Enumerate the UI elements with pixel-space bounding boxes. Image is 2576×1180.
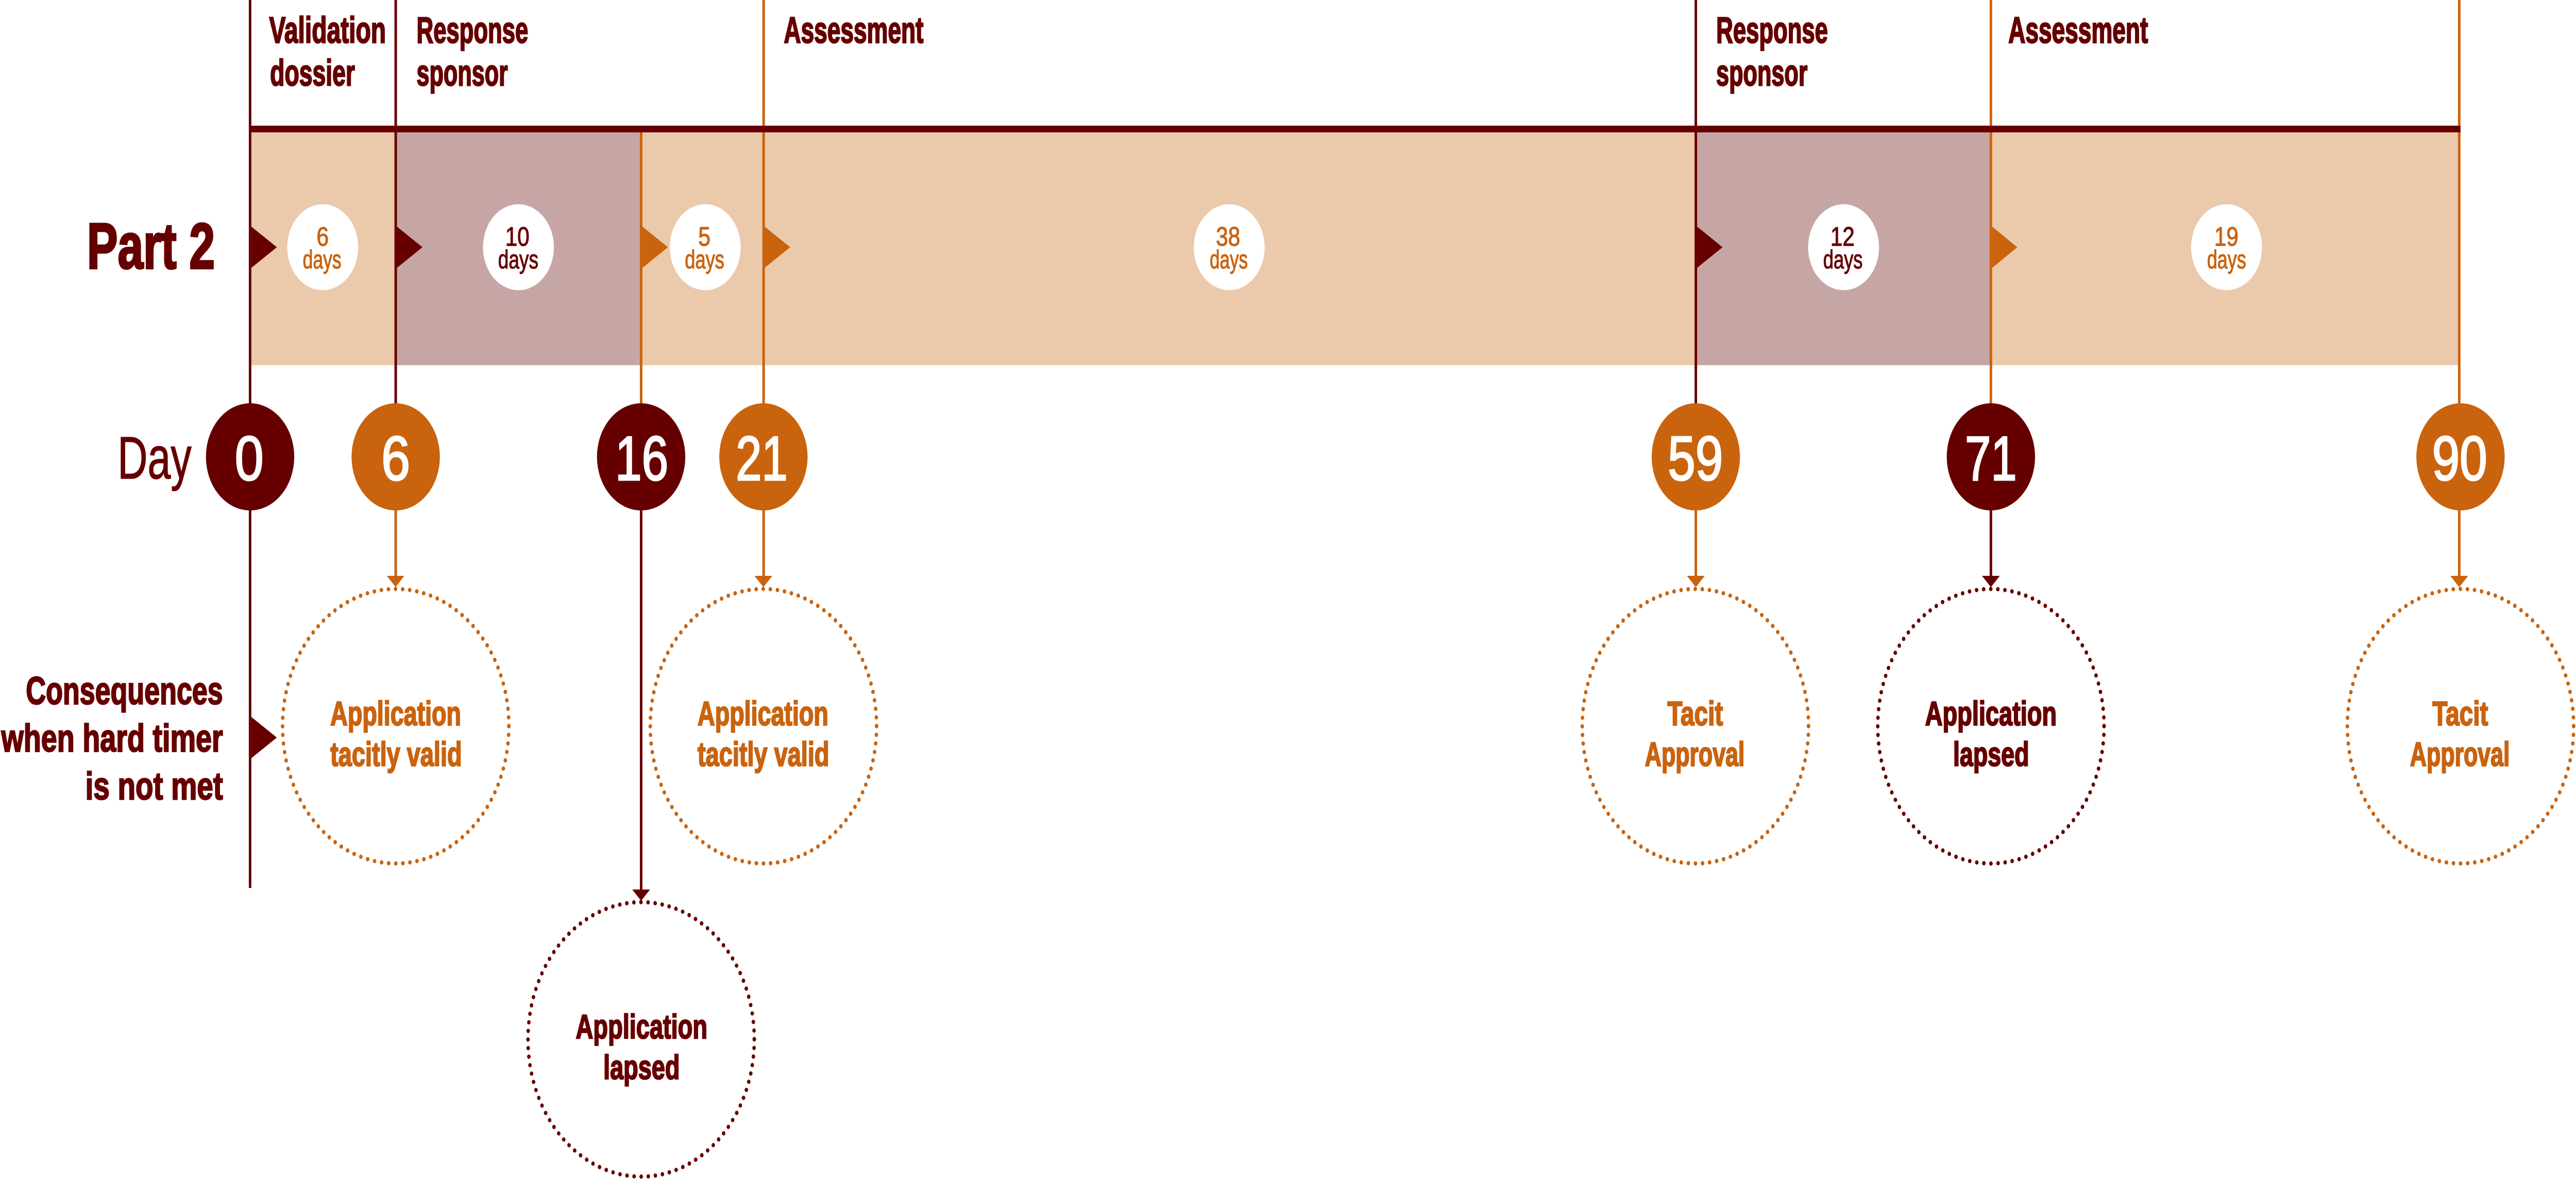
marker: day 59 triangle [1697, 227, 1722, 268]
outcome: Application tacitly valid (day 21) [650, 589, 876, 863]
outcome: Tacit Approval (day 90): Tacit [2432, 694, 2488, 732]
arrow: day 71 [1982, 576, 2000, 587]
duration: 5 days: 5 [698, 222, 710, 252]
marker: consequences triangle [251, 717, 277, 758]
day badge: 16 [597, 403, 685, 510]
duration: 10 days: days [498, 245, 538, 274]
marker: day 21 triangle [765, 227, 790, 268]
marker: day 16 triangle [642, 227, 668, 268]
outcome: Tacit Approval (day 90) [2347, 589, 2573, 863]
heading: Response sponsor second: sponsor [1716, 53, 1807, 93]
vertical line: day 90 [2458, 0, 2461, 577]
duration: 12 days: days [1823, 245, 1862, 274]
duration: 19 days [2191, 204, 2262, 290]
outcome: Tacit Approval (day 59) [1582, 589, 1808, 863]
heading: Response sponsor [416, 10, 528, 93]
vertical line: day 0 [249, 0, 251, 888]
top rule [250, 126, 2461, 132]
label: Consequences when hard timer is not met: when hard timer [1, 716, 223, 760]
day badge: 16: 16 [615, 423, 668, 493]
duration: 5 days [670, 204, 741, 290]
day badge: 71: 71 [1965, 423, 2017, 493]
vertical line: day 16 [640, 132, 642, 891]
duration: 12 days: 12 [1831, 222, 1855, 252]
duration: 38 days [1194, 204, 1265, 290]
day badge: 90 [2416, 403, 2505, 510]
marker: day 71 triangle [1992, 227, 2017, 268]
heading: Validation dossier: dossier [270, 53, 355, 93]
outcome: Application tacitly valid (day 21): Application [698, 694, 828, 732]
outcome: Application tacitly valid (day 6) [282, 589, 509, 863]
day badge: 59 [1652, 403, 1740, 510]
outcome: Application tacitly valid (day 6): tacitly valid [330, 735, 462, 773]
day badge: 6: 6 [381, 423, 410, 493]
outcome: Application lapsed (day 16): Application [576, 1007, 707, 1046]
duration: 38 days: 38 [1216, 222, 1240, 252]
duration: 19 days: days [2207, 245, 2246, 274]
duration: 6 days: days [303, 245, 342, 274]
duration: 6 days: 6 [316, 222, 329, 252]
outcome: Application lapsed (day 71) [1878, 589, 2104, 863]
outcome: Tacit Approval (day 59): Approval [1645, 735, 1744, 773]
title: Part 2: Part 2 [87, 211, 215, 282]
outcome: Application lapsed (day 16) [528, 902, 754, 1176]
duration: 6 days [287, 204, 358, 290]
day badge: 0 [206, 403, 294, 510]
label: Consequences when hard timer is not met [1, 669, 223, 808]
label: Day: Day [117, 424, 192, 491]
arrow: day 59 [1687, 576, 1705, 587]
day badge: 90: 90 [2432, 423, 2487, 493]
arrow: day 90 [2450, 576, 2468, 587]
arrow: day 16 [632, 890, 650, 901]
duration: 38 days: days [1210, 245, 1248, 274]
heading: Response sponsor: Response [416, 10, 528, 50]
timeline band [250, 132, 2459, 365]
outcome: Application tacitly valid (day 21): tacitly valid [698, 735, 829, 773]
outcome: Application tacitly valid (day 6): Application [330, 694, 461, 732]
duration: 19 days: 19 [2214, 222, 2239, 252]
marker: day 0 triangle [251, 227, 277, 268]
outcome: Application lapsed (day 16): lapsed [603, 1048, 680, 1086]
vertical line: day 21 [762, 0, 765, 577]
day badge: 6 [351, 403, 440, 510]
heading: Response sponsor: sponsor [416, 53, 508, 93]
day badge: 59: 59 [1668, 423, 1723, 493]
outcome: Tacit Approval (day 59): Tacit [1667, 694, 1723, 732]
label: Consequences when hard timer is not met: is not met [86, 764, 223, 808]
heading: Response sponsor second [1716, 10, 1828, 93]
vertical line: day 59 [1694, 0, 1697, 577]
outcome: Application lapsed (day 71): Application [1925, 694, 2057, 732]
duration: 12 days [1808, 204, 1879, 290]
day badge: 21 [719, 403, 807, 510]
duration: 10 days: 10 [505, 222, 530, 252]
outcome: Tacit Approval (day 90): Approval [2410, 735, 2510, 773]
heading: Validation dossier: Validation [269, 10, 386, 50]
outcome: Application lapsed (day 71): lapsed [1953, 735, 2029, 773]
day badge: 71 [1947, 403, 2035, 510]
vertical line: day 6 [395, 0, 397, 577]
day badge: 21: 21 [736, 423, 788, 493]
arrow: day 21 [754, 576, 772, 587]
heading: Assessment: Assessment [784, 10, 923, 50]
marker: day 6 triangle [397, 227, 422, 268]
label: Consequences when hard timer is not met: Consequences [26, 669, 223, 712]
duration: 10 days [483, 204, 554, 290]
heading: Response sponsor second: Response [1716, 10, 1828, 50]
heading: Validation dossier [269, 10, 386, 93]
duration: 5 days: days [685, 245, 724, 274]
heading: Assessment second: Assessment [2008, 10, 2148, 50]
arrow: day 6 [387, 576, 404, 587]
day badge: 0: 0 [235, 423, 264, 493]
vertical line: day 71 [1990, 0, 1992, 577]
